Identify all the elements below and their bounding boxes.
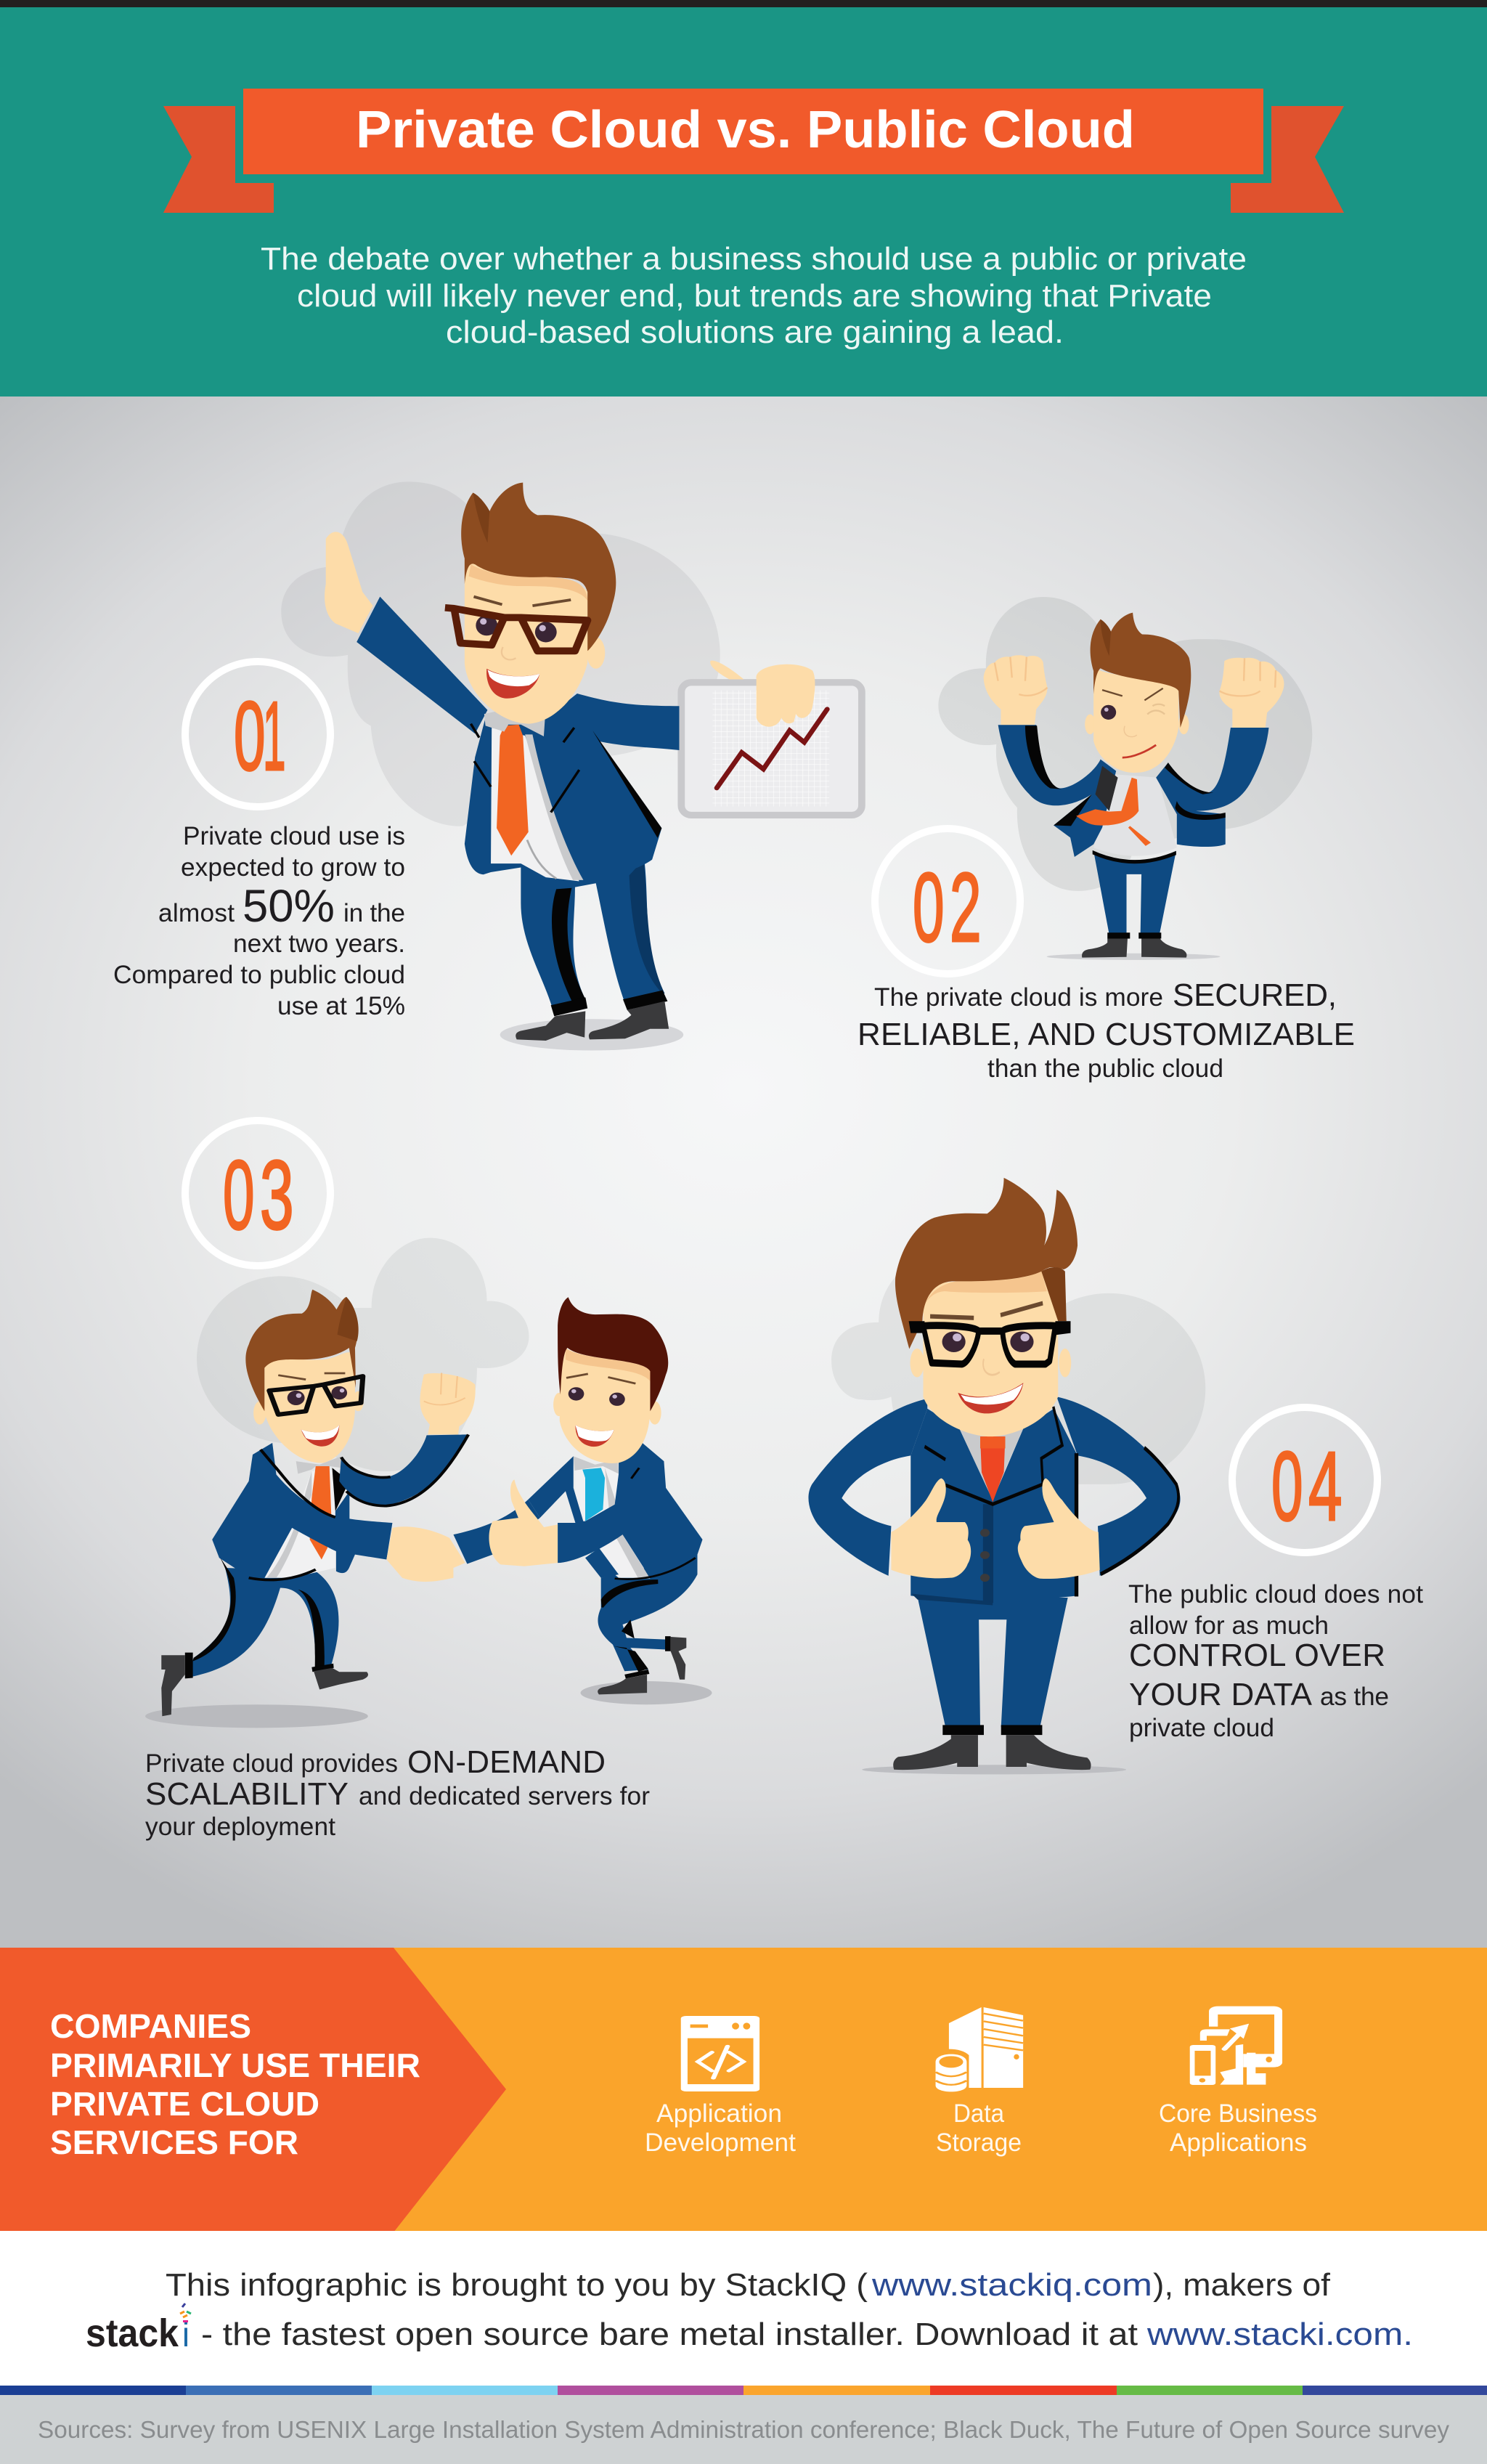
jacket [528, 1443, 703, 1578]
number badge 01 [185, 662, 330, 807]
text block 2 [857, 977, 1355, 1083]
color strip [0, 2386, 1487, 2395]
number badge 01: 0 [234, 682, 266, 791]
band heading: COMPANIES [50, 2007, 251, 2045]
handshake [386, 1526, 465, 1582]
background cloud 2 [938, 597, 1312, 891]
shirt and tie [264, 1470, 335, 1578]
credit line 1: This infographic is brought to you by StackIQ ( [166, 2267, 868, 2303]
label: application development [645, 2099, 796, 2157]
band heading: SERVICES FOR [50, 2123, 298, 2161]
text block 4: The public cloud does not [1128, 1580, 1423, 1609]
credit line 1: ), makers of [1153, 2267, 1331, 2303]
thumbs up hand [489, 1479, 558, 1566]
label: core business applications: Applications [1170, 2128, 1307, 2157]
text block 1: use at 15% [277, 992, 405, 1020]
text block 1: almost [158, 899, 235, 927]
ribbon banner [163, 89, 1344, 213]
number badge 03: 3 [260, 1139, 294, 1250]
jacket [998, 725, 1116, 857]
icon: application development [681, 2016, 759, 2091]
tie [1076, 778, 1138, 826]
number badge 03: 0 [223, 1141, 255, 1250]
orange arrow [0, 1948, 506, 2232]
number badge 03 [185, 1121, 330, 1266]
background cloud 3 [197, 1238, 529, 1471]
panel: companies band [0, 1948, 1487, 2232]
intro text: cloud-based solutions are gaining a lead. [446, 314, 1064, 350]
head with black glasses [245, 1290, 364, 1463]
text block 1: expected to grow to [181, 853, 405, 882]
text block 3: ON-DEMAND [407, 1744, 606, 1780]
band heading: PRIMARILY USE THEIR [50, 2046, 420, 2084]
sources text: Sources: Survey from USENIX Large Installation System Administration conference; Black Duck, The Future of Open Source survey [38, 2416, 1449, 2443]
right fist [1219, 658, 1284, 728]
number badge 04 [1232, 1407, 1377, 1553]
tablet with chart [681, 661, 862, 815]
intro text: The debate over whether a business should use a public or private [261, 241, 1247, 277]
raised hand [325, 532, 373, 633]
label: core business applications: Core Business [1159, 2099, 1317, 2128]
character 1: businessman presenting chart [325, 482, 862, 1051]
suit jacket [465, 694, 679, 881]
band heading [50, 2007, 420, 2161]
label: application development: Development [645, 2128, 796, 2157]
text block 3: Private cloud provides [145, 1749, 398, 1778]
character 3a: running businessman with glasses [145, 1290, 476, 1728]
label: application development: Application [656, 2099, 782, 2128]
stacki logo: i [183, 2316, 189, 2354]
label: data storage [936, 2099, 1022, 2157]
panel: credits [0, 2231, 1487, 2386]
head winking [1085, 613, 1191, 773]
number badge 04: 0 [1271, 1432, 1303, 1541]
stacki logo: stack [86, 2311, 179, 2355]
number badge 02 [875, 829, 1020, 974]
text block 1: Private cloud use is [183, 822, 405, 850]
text block 1: Compared to public cloud [113, 961, 405, 989]
credit line 2: www.stacki.com. [1146, 2317, 1413, 2352]
text block 2: The private cloud is more [874, 983, 1163, 1012]
intro text [261, 241, 1247, 350]
panel: header [0, 7, 1487, 397]
head with dark hair [553, 1297, 668, 1463]
jacket [212, 1443, 392, 1578]
left thumbs up hand [891, 1479, 971, 1578]
label: data storage: Storage [936, 2128, 1022, 2157]
text block 2: than the public cloud [987, 1054, 1223, 1083]
background cloud 1 [281, 481, 720, 826]
credit line 2: - the fastest open source bare metal installer. Download it at [201, 2317, 1138, 2352]
band heading: PRIVATE CLOUD [50, 2085, 319, 2123]
raised fist [420, 1373, 476, 1434]
icon: data storage [936, 2007, 1023, 2091]
text block 3: and dedicated servers for [359, 1782, 650, 1810]
top black bar [0, 0, 1487, 7]
text block 4: allow for as much [1129, 1611, 1329, 1640]
label: core business applications [1159, 2099, 1317, 2157]
head with black glasses [895, 1178, 1077, 1436]
character 4: front-facing businessman with two thumbs up [808, 1178, 1181, 1774]
right thumbs up hand [1018, 1479, 1100, 1579]
text block 3: your deployment [145, 1813, 335, 1841]
number badge 02: 2 [950, 853, 982, 962]
panel: main gray area [0, 397, 1487, 1949]
text block 4: private cloud [1129, 1714, 1274, 1742]
character 3b: businessman with thumbs up and blue tie [453, 1297, 712, 1704]
shirt and tie [575, 1465, 646, 1578]
panel: sources [0, 2395, 1487, 2464]
credit line 1: www.stackiq.com [871, 2267, 1152, 2303]
text block 4: YOUR DATA [1129, 1677, 1313, 1712]
number badge 04: 4 [1308, 1431, 1343, 1541]
left fist [984, 655, 1048, 725]
text block 1: 50% [243, 881, 335, 932]
text block 3: SCALABILITY [145, 1776, 349, 1812]
collar and tie [959, 1428, 1023, 1500]
head with glasses [445, 482, 616, 724]
number badge 02: 0 [913, 853, 945, 962]
text block 4 [1128, 1580, 1423, 1742]
buttons [980, 1529, 990, 1582]
text block 1 [113, 822, 405, 1020]
label: data storage: Data [953, 2099, 1004, 2128]
icon: core business applications [1190, 2006, 1282, 2085]
text block 4: as the [1320, 1683, 1389, 1711]
background cloud 4 [831, 1261, 1205, 1484]
credit line 1 [166, 2267, 1331, 2303]
character 2: winking businessman with raised fists [984, 613, 1284, 960]
text block 3 [145, 1744, 650, 1841]
text block 1: in the [343, 899, 405, 927]
number badge 01: 1 [263, 680, 286, 791]
title: Private Cloud vs. Public Cloud [356, 101, 1135, 159]
jacket and arms [910, 1409, 1077, 1604]
intro text: cloud will likely never end, but trends are showing that Private [297, 278, 1212, 314]
text block 2: SECURED, [1173, 977, 1337, 1013]
text block 4: CONTROL OVER [1129, 1638, 1385, 1673]
text block 1: next two years. [233, 930, 405, 958]
text block 2: RELIABLE, AND CUSTOMIZABLE [857, 1017, 1355, 1052]
